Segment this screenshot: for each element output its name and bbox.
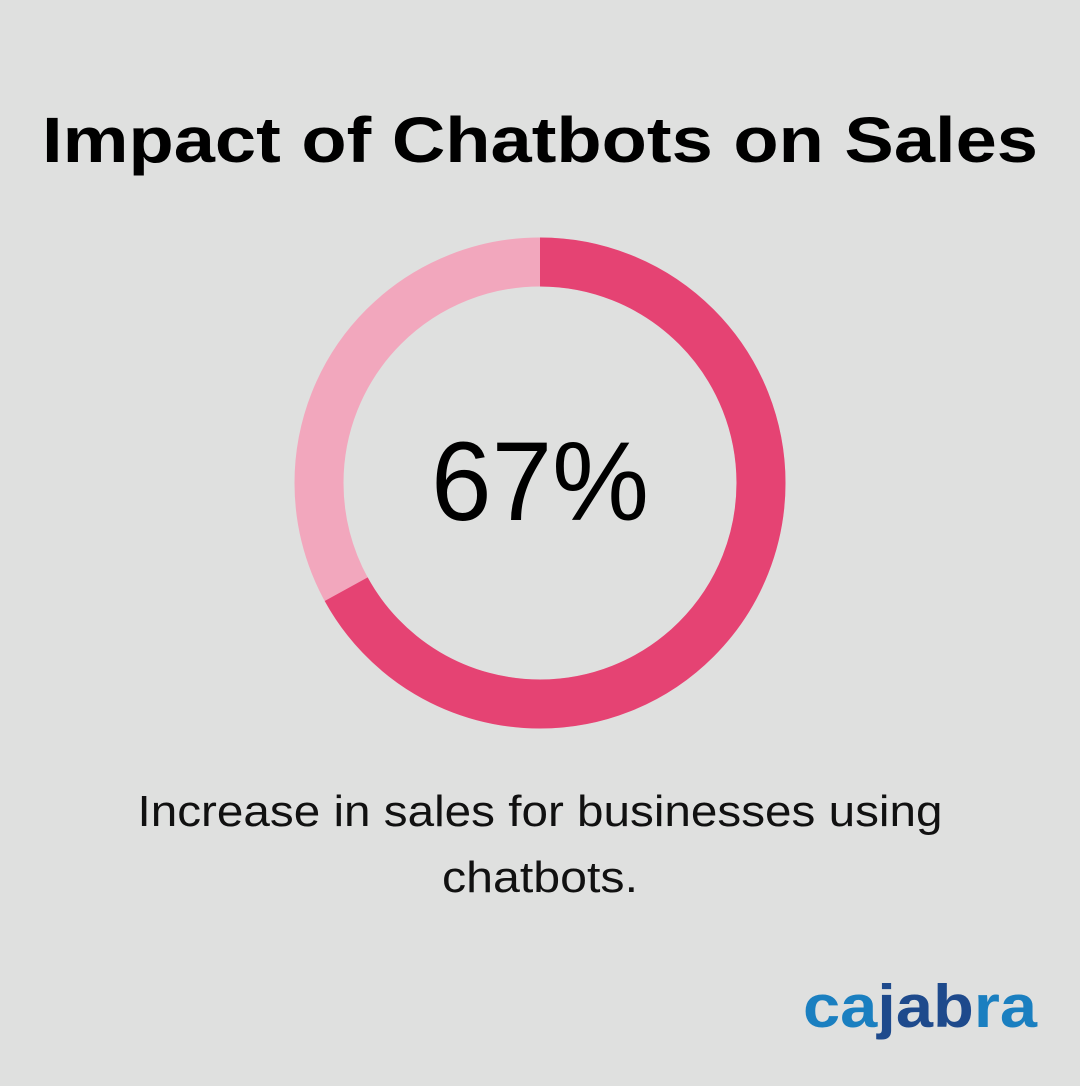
donut chart: 67% — [319, 262, 761, 704]
caption: Increase in sales for businesses using — [138, 787, 943, 836]
caption: chatbots. — [442, 853, 638, 902]
caption — [138, 787, 943, 902]
center value: 67% — [431, 419, 649, 544]
logo: cajabra: cajabra — [803, 973, 1038, 1040]
title: Impact of Chatbots on Sales — [42, 104, 1038, 176]
